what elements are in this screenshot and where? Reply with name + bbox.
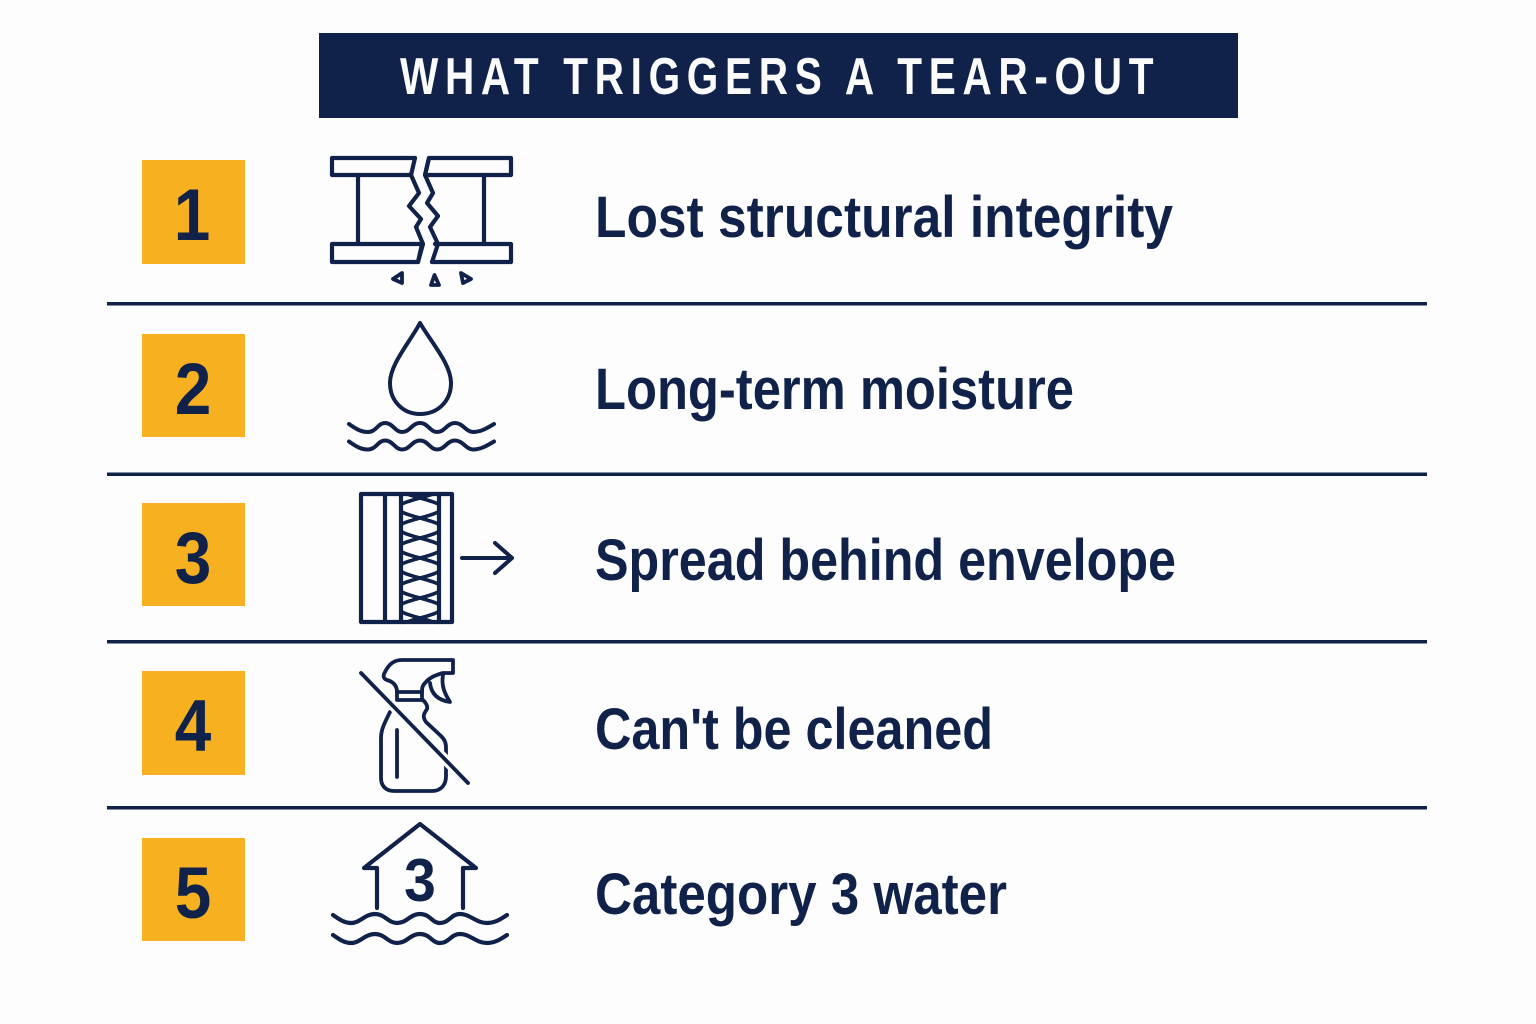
label 2: Long-term moisture (595, 357, 1074, 422)
label 3: Spread behind envelope (595, 528, 1176, 593)
number badge 5: 5 (175, 852, 211, 934)
row 3: spread behind envelope (142, 488, 1176, 628)
label 5: Category 3 water (595, 862, 1007, 927)
row 2: long-term moisture (142, 323, 1074, 450)
icon: water drop over waves (349, 323, 494, 450)
number badge 4 (142, 671, 245, 775)
icon: wall section with insulation and arrow (361, 488, 512, 628)
label 4: Can't be cleaned (595, 697, 993, 762)
number badge 3: 3 (175, 517, 211, 599)
title banner: WHAT TRIGGERS A TEAR-OUT (400, 47, 1153, 105)
icon: flooded house with 3 (333, 824, 507, 943)
number badge 1 (142, 160, 245, 264)
number badge 3 (142, 503, 245, 606)
row 1: lost structural integrity (142, 158, 1173, 285)
number badge 4: 4 (175, 685, 212, 767)
icon: crossed-out spray bottle (361, 660, 468, 791)
label 1: Lost structural integrity (595, 185, 1173, 250)
number badge 2: 2 (175, 348, 211, 430)
row 4: can't be cleaned (142, 660, 993, 791)
number badge 5 (142, 838, 245, 941)
number badge 1: 1 (174, 174, 210, 256)
icon: flooded house with 3: 3 (404, 848, 436, 914)
icon: cracked beam (332, 158, 511, 285)
row 5: category 3 water (142, 824, 1007, 943)
title banner (319, 33, 1238, 118)
number badge 2 (142, 334, 245, 437)
